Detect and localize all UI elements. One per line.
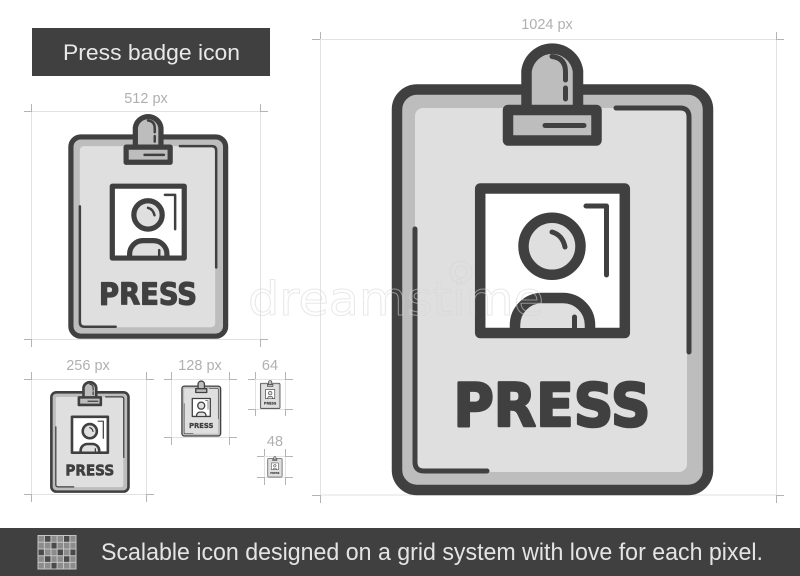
PRESS label: PRESS (454, 371, 650, 441)
title banner: Press badge icon (63, 40, 240, 65)
size guide: 128 px: 128 px (178, 358, 223, 374)
size guide: 48 px: 48 (267, 434, 283, 450)
size guide: 256 px: 256 px (66, 358, 111, 374)
watermark: dreamstime (248, 272, 544, 326)
badge clip (508, 49, 596, 140)
size guide: 1024 px: 1024 px (521, 17, 574, 33)
size guide: 256 px (24, 358, 154, 502)
ID photo (480, 188, 625, 333)
icon: press badge 64 px (260, 381, 280, 409)
title banner (32, 28, 270, 76)
size guide: 128 px (164, 358, 237, 445)
icon: pixel grid (38, 536, 76, 569)
badge body (397, 90, 708, 490)
icon: press badge 256 px: PRESS (65, 462, 114, 480)
size guide: 64 px (248, 358, 293, 416)
icon: press badge 1024 px (397, 49, 708, 490)
footer tagline: Scalable icon designed on a grid system with love for each pixel. (101, 539, 763, 566)
icon: press badge 48 px (268, 456, 282, 477)
icon: press badge 256 px (51, 382, 128, 492)
icon: press badge 64 px: PRESS (264, 401, 277, 406)
icon: press badge 128 px (182, 381, 221, 436)
footer bar (0, 528, 800, 576)
size guide: 512 px (24, 91, 268, 347)
icon: press badge 128 px: PRESS (189, 421, 213, 430)
icon: press badge 48 px: PRESS (270, 471, 279, 475)
icon: press badge 512 px (71, 117, 226, 336)
size guide: 48 px (257, 434, 293, 485)
size guide: 64 px: 64 (262, 358, 278, 374)
icon: press badge 512 px: PRESS (99, 277, 197, 312)
size guide: 512 px: 512 px (124, 91, 169, 107)
